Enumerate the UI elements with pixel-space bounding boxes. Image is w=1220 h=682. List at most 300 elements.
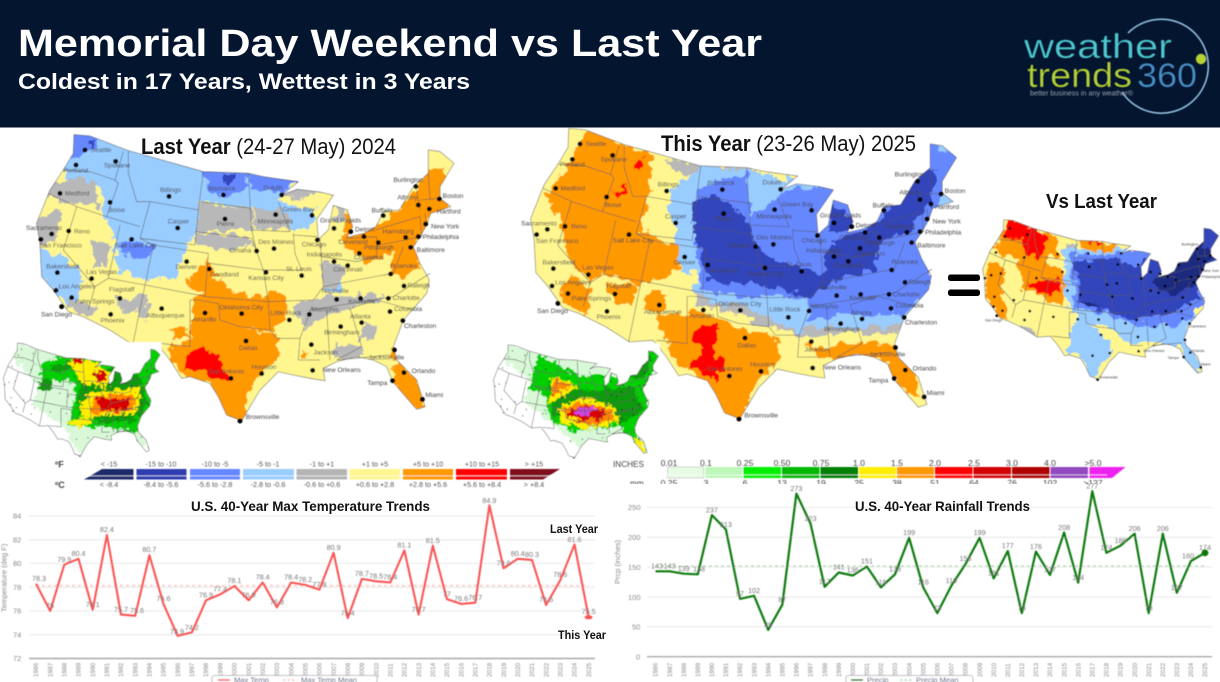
state borders — [37, 135, 454, 421]
year labels: 2013 — [1033, 662, 1040, 677]
legend: precipitation scale: 3.0 — [1006, 458, 1018, 468]
data labels: 138 — [693, 564, 705, 574]
data labels: 137 — [1044, 565, 1056, 574]
legend: precipitation scale: 64 — [969, 478, 979, 488]
year labels: 2024 — [1188, 662, 1195, 677]
city labels: Orlando — [913, 365, 937, 372]
legend: temperature scale: -15 to -10 — [146, 460, 176, 468]
legend: temperature scale: +2.8 to +5.6 — [409, 480, 447, 489]
y axis labels: 72 — [13, 654, 21, 663]
small city labels: Miami — [1201, 362, 1211, 366]
data labels: 81.5 — [426, 536, 440, 545]
data labels: 76.9 — [199, 590, 213, 600]
data labels: 143 — [651, 562, 663, 570]
small city labels: Charleston — [1188, 325, 1206, 329]
city labels: Raleigh — [908, 279, 931, 286]
city labels: Nashville — [322, 288, 349, 295]
city labels: Grand Rapids — [320, 218, 362, 225]
data labels: 151 — [861, 556, 873, 566]
year labels: 1990 — [90, 662, 97, 677]
annotation: last year: Last Year — [550, 524, 598, 536]
city labels: New York — [933, 219, 961, 226]
logo: weathertrends360: 360 — [1137, 57, 1197, 95]
data labels: 199 — [903, 528, 915, 537]
city labels: Casper — [665, 213, 687, 220]
city labels: Little Rock — [769, 307, 801, 314]
data labels: 73 — [1018, 604, 1026, 612]
y axis labels: 0 — [636, 652, 640, 662]
city labels: Los Angeles — [59, 283, 96, 290]
legend: precipitation scale: 0.1 — [700, 458, 712, 468]
year labels: 2007 — [949, 662, 956, 677]
legend: precipitation scale: 0.75 — [813, 458, 830, 468]
year labels: 1991 — [723, 662, 730, 677]
city labels: Knoxville — [849, 295, 876, 302]
small city labels: San Diego — [985, 319, 1002, 323]
year labels: 1988 — [62, 662, 68, 677]
city labels: San Diego — [537, 308, 568, 315]
city labels: Goodland — [210, 272, 239, 279]
year labels: 2008 — [963, 662, 970, 677]
data labels: 78.3 — [32, 574, 46, 583]
city labels: Los Angeles — [555, 279, 592, 286]
city labels: Bakersfield — [542, 260, 576, 267]
year labels: 2002 — [878, 662, 885, 677]
year labels: 1987 — [667, 662, 674, 677]
city labels: Albany — [397, 195, 418, 202]
city labels: Jackson — [313, 349, 338, 356]
city labels: Burlington — [393, 177, 424, 184]
city labels: Houston — [750, 362, 775, 369]
city dots — [537, 144, 941, 419]
equals sign — [948, 274, 980, 296]
year labels: 2019 — [1118, 662, 1125, 677]
data labels: 75.4 — [341, 608, 355, 618]
year labels: 2018 — [1104, 662, 1111, 677]
y axis labels: 74 — [13, 630, 21, 639]
data labels: 141 — [833, 562, 845, 572]
legend: precipitation scale: 102 — [1043, 478, 1057, 488]
city labels: New Orleans — [823, 365, 862, 372]
year labels — [33, 662, 593, 677]
city labels: Columbia — [394, 306, 422, 313]
data labels: 155 — [960, 554, 972, 563]
year labels: 1995 — [780, 662, 786, 677]
city dots — [41, 150, 439, 421]
y axis labels — [0, 512, 21, 663]
city labels: Casper — [168, 218, 190, 225]
city labels: Jacksonville — [368, 354, 405, 361]
legend: precipitation scale: 51 — [930, 478, 940, 488]
city labels: Denver — [674, 260, 696, 267]
data labels: 76.6 — [156, 594, 170, 603]
city labels: Birmingham — [824, 326, 860, 333]
data labels: 74.2 — [185, 623, 199, 632]
year labels: 2014 — [430, 662, 437, 677]
data labels: 78.5 — [369, 572, 383, 580]
city labels: Palm Springs — [572, 296, 612, 303]
legend: precipitation scale: INCHES — [613, 460, 644, 469]
year labels: 1988 — [681, 662, 688, 677]
city labels: Phoenix — [597, 314, 621, 321]
data labels: 223 — [804, 514, 816, 523]
data labels: 76.9 — [242, 590, 256, 600]
year labels: 2003 — [274, 662, 281, 677]
city labels: Sacramento — [521, 221, 557, 228]
data labels: 186 — [1114, 536, 1126, 545]
data labels: 136 — [847, 566, 859, 574]
city labels: Houston — [252, 364, 277, 371]
city labels: Hartford — [437, 209, 461, 216]
logo: weathertrends360: trends — [1027, 57, 1132, 95]
subtitle: Coldest in 17 Years, Wettest in 3 Years — [18, 69, 470, 94]
year labels: 2016 — [1075, 662, 1082, 677]
city labels: Albuquerque — [147, 312, 185, 319]
city labels: Flagstaff — [109, 287, 135, 294]
year labels: 2011 — [388, 663, 394, 677]
logo: weathertrends360: better business in any weather® — [1030, 90, 1134, 98]
city labels: Oklahoma City — [718, 301, 762, 308]
city labels: Burlington — [895, 172, 925, 179]
year labels: 2000 — [850, 662, 857, 677]
data labels: 78.2 — [298, 575, 312, 584]
year labels: 2000 — [232, 662, 239, 677]
city labels: Albuquerque — [644, 309, 682, 316]
city labels: Dallas — [738, 342, 757, 349]
year labels: 2006 — [317, 662, 324, 677]
city labels: Roanoke — [391, 263, 418, 270]
city labels — [521, 141, 966, 419]
city labels: Green Bay — [782, 201, 814, 208]
city labels: Orlando — [412, 368, 436, 375]
panel: last year temperature map — [26, 128, 464, 430]
city labels: Omaha — [229, 247, 251, 254]
city labels: Spokane — [601, 156, 627, 163]
data labels: 80.7 — [142, 545, 156, 554]
year labels: 1989 — [76, 662, 83, 677]
city labels: Charlotte — [393, 295, 420, 302]
city labels: Chicago — [302, 242, 326, 249]
city labels: Jackson — [804, 347, 829, 354]
data labels: 73 — [933, 604, 941, 612]
year labels: 1992 — [118, 662, 125, 677]
legend: precipitation scale: 25 — [854, 478, 864, 488]
data labels: 97 — [736, 589, 744, 598]
data labels: 174 — [1199, 543, 1211, 552]
city labels: Portland — [560, 162, 585, 169]
data labels: 76.5 — [539, 595, 553, 604]
city labels: Amarillo — [192, 316, 217, 323]
city labels: New York — [431, 223, 460, 230]
data labels: 116 — [875, 578, 887, 586]
data labels: 78.7 — [355, 569, 369, 578]
year labels: 1990 — [709, 662, 716, 677]
city labels: Memphis — [811, 303, 839, 310]
data labels: 208 — [1058, 523, 1070, 532]
mean line — [655, 565, 1205, 567]
data labels: 176 — [1030, 542, 1042, 551]
city labels: Harrisburg — [884, 223, 915, 230]
heading: last year: Last Year (24-27 May) 2024 — [141, 134, 396, 159]
city labels: Oklahoma City — [219, 304, 264, 311]
year labels: 2012 — [402, 662, 409, 677]
chart legend — [212, 676, 377, 682]
small city labels: Burlington — [1182, 243, 1198, 247]
legend: temperature scale: -5.6 to -2.8 — [198, 480, 232, 489]
year labels: 2012 — [1019, 662, 1026, 677]
city labels: Denver — [176, 264, 198, 271]
legend: temperature scale: +1 to +5 — [362, 460, 388, 468]
y axis labels: 76 — [13, 606, 21, 616]
city labels: Little Rock — [270, 310, 302, 317]
chart: rainfall trends — [613, 482, 1212, 682]
y axis labels: Prcp (inches) — [613, 539, 622, 584]
year labels: 2018 — [487, 662, 494, 677]
city labels: Brownsville — [246, 414, 280, 421]
year labels: 1986 — [653, 662, 660, 677]
header banner — [0, 0, 1220, 128]
year labels: 2010 — [373, 662, 380, 677]
legend: temperature scale: ºF — [55, 460, 64, 470]
city labels: Reno — [74, 228, 90, 235]
city labels: Cleveland — [338, 239, 368, 246]
city labels: Charlotte — [893, 291, 920, 298]
city labels: Tampa — [868, 378, 889, 385]
year labels: 1999 — [217, 662, 224, 677]
legend: temperature scale: +0.6 to +2.8 — [356, 480, 394, 489]
small city labels — [985, 243, 1220, 379]
data labels: 76.3 — [270, 598, 284, 606]
legend: precipitation scale: >5.0 — [1085, 458, 1102, 468]
year labels: 2009 — [359, 662, 366, 677]
data labels: 76 — [46, 601, 54, 610]
legend: temperature scale: > +8.4 — [524, 480, 544, 489]
year labels: 2025 — [1202, 662, 1209, 677]
city labels: Goodland — [709, 268, 738, 275]
small city labels: Orlando — [1192, 349, 1205, 353]
year labels: 2003 — [892, 662, 899, 677]
y axis labels: 100 — [628, 593, 641, 602]
data labels: 160 — [1182, 552, 1194, 560]
legend: temperature scale: +10 to +15 — [465, 460, 499, 468]
map 2025 temperature zones — [523, 127, 967, 427]
data labels: 206 — [1157, 524, 1169, 533]
year labels: 2001 — [864, 662, 871, 677]
data labels: 139 — [678, 564, 690, 573]
small city labels: Brownsville — [1099, 375, 1118, 379]
city labels: Baltimore — [917, 242, 946, 249]
city labels: Pittsburgh — [364, 244, 394, 251]
city labels: Billings — [658, 182, 679, 189]
data labels: 77 — [443, 590, 451, 598]
city labels: Seattle — [586, 141, 607, 148]
data labels: 177 — [1002, 541, 1014, 550]
city labels: Charleston — [404, 323, 436, 330]
year labels: 1994 — [147, 662, 154, 677]
legend: temperature scale: -5 to -1 — [257, 460, 279, 468]
year labels: 1996 — [175, 662, 182, 677]
year labels: 1993 — [132, 662, 139, 677]
mean line — [36, 585, 589, 587]
city labels: Jacksonville — [869, 352, 906, 359]
year labels: 2006 — [934, 662, 942, 677]
year labels: 2001 — [246, 662, 253, 677]
data labels: 174 — [1100, 543, 1112, 552]
data labels: 76.7 — [468, 593, 482, 602]
year labels: 2017 — [472, 662, 480, 677]
state borders — [531, 128, 956, 419]
city labels: Dallas — [239, 345, 258, 352]
year labels: 2024 — [572, 662, 579, 677]
city labels: Buffalo — [873, 203, 894, 210]
data labels: 75.5 — [582, 607, 596, 616]
data labels — [32, 496, 596, 636]
year labels: 2004 — [906, 662, 913, 677]
legend: precipitation scale: 2.0 — [929, 458, 941, 468]
year labels: 1995 — [161, 662, 168, 677]
year labels: 2002 — [260, 662, 267, 677]
legend: precipitation scale: 3 — [704, 478, 709, 488]
year labels: 2009 — [977, 662, 984, 677]
city labels: Las Vegas — [582, 265, 614, 272]
city labels: Roanoke — [892, 259, 919, 266]
data labels: 213 — [720, 520, 732, 529]
legend: precipitation scale: 1.5 — [891, 458, 903, 468]
year labels: 1991 — [104, 662, 111, 677]
legend: temperature scale: ºC — [55, 480, 65, 490]
year labels: 2025 — [586, 662, 593, 677]
city labels: Amarillo — [690, 313, 714, 320]
legend: precipitation scale: 2.5 — [968, 458, 980, 468]
data labels: 199 — [974, 528, 986, 537]
legend: precipitation scale: 76 — [1007, 478, 1017, 488]
year labels: 2021 — [1146, 662, 1153, 677]
legend: temperature scale: > +15 — [525, 460, 543, 468]
y axis labels: 84 — [13, 512, 21, 520]
city labels: San Francisco — [39, 242, 82, 249]
city labels: Boston — [443, 193, 464, 200]
city labels: Medford — [561, 185, 585, 192]
city labels: Atlanta — [350, 314, 371, 321]
data labels: 80.3 — [525, 550, 539, 559]
chart grid and axis — [29, 516, 595, 658]
city labels: Minneapolis — [757, 213, 793, 220]
data labels: 76.1 — [86, 600, 100, 609]
city labels: Bakersfield — [46, 264, 79, 271]
city labels: Indianapolis — [307, 252, 343, 259]
data labels: 78.4 — [383, 572, 397, 582]
data labels: 45 — [764, 620, 772, 630]
city labels: Boston — [945, 188, 966, 195]
panel: difference map — [977, 213, 1220, 387]
y axis labels: 78 — [13, 583, 21, 592]
city labels: Columbia — [895, 302, 924, 309]
map 2024 temperature zones — [30, 128, 463, 430]
city labels: Reno — [571, 224, 587, 231]
legend: precipitation scale: 4.0 — [1044, 458, 1056, 468]
city labels: Des Moines — [258, 239, 294, 246]
max temp line — [36, 505, 589, 636]
legend: temperature scale: -8.4 to -5.6 — [144, 480, 178, 489]
year labels: 2007 — [331, 662, 338, 677]
data labels: 76.6 — [454, 594, 468, 603]
city labels: Kansas City — [248, 275, 285, 282]
year labels: 2022 — [1160, 662, 1167, 677]
annotation: this year: This Year — [558, 630, 606, 642]
small city labels: Tampa — [1168, 356, 1180, 360]
city labels: Miami — [425, 392, 444, 399]
city labels: Salt Lake City — [116, 242, 157, 249]
year labels: 2023 — [558, 662, 564, 677]
city labels: Indianapolis — [806, 247, 842, 254]
data labels: 80.4 — [511, 549, 525, 558]
city labels: New Orleans — [322, 367, 361, 374]
logo: weathertrends360: weather — [1023, 28, 1172, 66]
year labels — [653, 662, 1209, 677]
inset: last year rainfall map — [2, 342, 163, 456]
legend: precipitation scale: 6 — [743, 478, 748, 488]
year labels: 1994 — [765, 662, 772, 677]
city labels: Duluth — [763, 180, 782, 187]
data labels: 277 — [1086, 482, 1098, 490]
city labels: Green Bay — [283, 206, 315, 213]
city labels: Salt Lake City — [613, 238, 654, 245]
city labels: St. Louis — [786, 262, 813, 269]
city labels: Sacramento — [26, 225, 62, 232]
city labels: Tampa — [367, 380, 388, 387]
legend: temperature scale: < -8.4 — [100, 480, 118, 489]
city labels: Bismarck — [208, 186, 236, 193]
city labels: Spokane — [104, 162, 131, 169]
data labels: 77.4 — [213, 584, 227, 594]
city labels: Pittsburgh — [865, 240, 895, 247]
panel: this year temperature map — [521, 127, 967, 427]
year labels: 1993 — [751, 662, 758, 677]
city labels: Medford — [65, 191, 90, 198]
legend: precipitation scale: 0.01 — [661, 458, 678, 468]
legend: temperature scale: -1 to +1 — [310, 460, 334, 468]
city labels: Pierre — [217, 221, 235, 228]
data labels: 107 — [1171, 583, 1183, 592]
legend: temperature scale: < -15 — [101, 460, 117, 468]
data labels: 75.7 — [114, 605, 128, 614]
data labels: 206 — [1129, 524, 1141, 533]
year labels: 2015 — [444, 662, 451, 677]
year labels: 1992 — [737, 662, 744, 677]
data labels: 75.7 — [412, 605, 426, 614]
title: Memorial Day Weekend vs Last Year — [18, 23, 762, 65]
small city labels: New York — [1203, 269, 1219, 273]
city labels: Buffalo — [372, 207, 393, 214]
year labels: 1989 — [695, 662, 702, 677]
chart title: max temperature: U.S. 40-Year Max Temperature Trends — [191, 498, 430, 514]
year labels: 2022 — [543, 662, 550, 677]
data labels: 78.1 — [227, 576, 241, 585]
city labels: Hartford — [935, 204, 959, 211]
city labels: Raleigh — [407, 282, 430, 289]
data labels: 79.9 — [57, 555, 71, 564]
year labels: 2014 — [1047, 662, 1054, 677]
data labels: 273 — [790, 484, 802, 493]
data labels: 116 — [917, 578, 929, 586]
city labels: Kansas City — [748, 271, 784, 278]
data labels: 131 — [988, 568, 1000, 578]
year labels: 2005 — [920, 662, 927, 677]
city labels: Seattle — [91, 147, 112, 154]
year labels: 1997 — [189, 662, 196, 677]
city labels: Birmingham — [324, 329, 360, 336]
legend: temperature scale: -0.6 to +0.6 — [304, 480, 340, 489]
